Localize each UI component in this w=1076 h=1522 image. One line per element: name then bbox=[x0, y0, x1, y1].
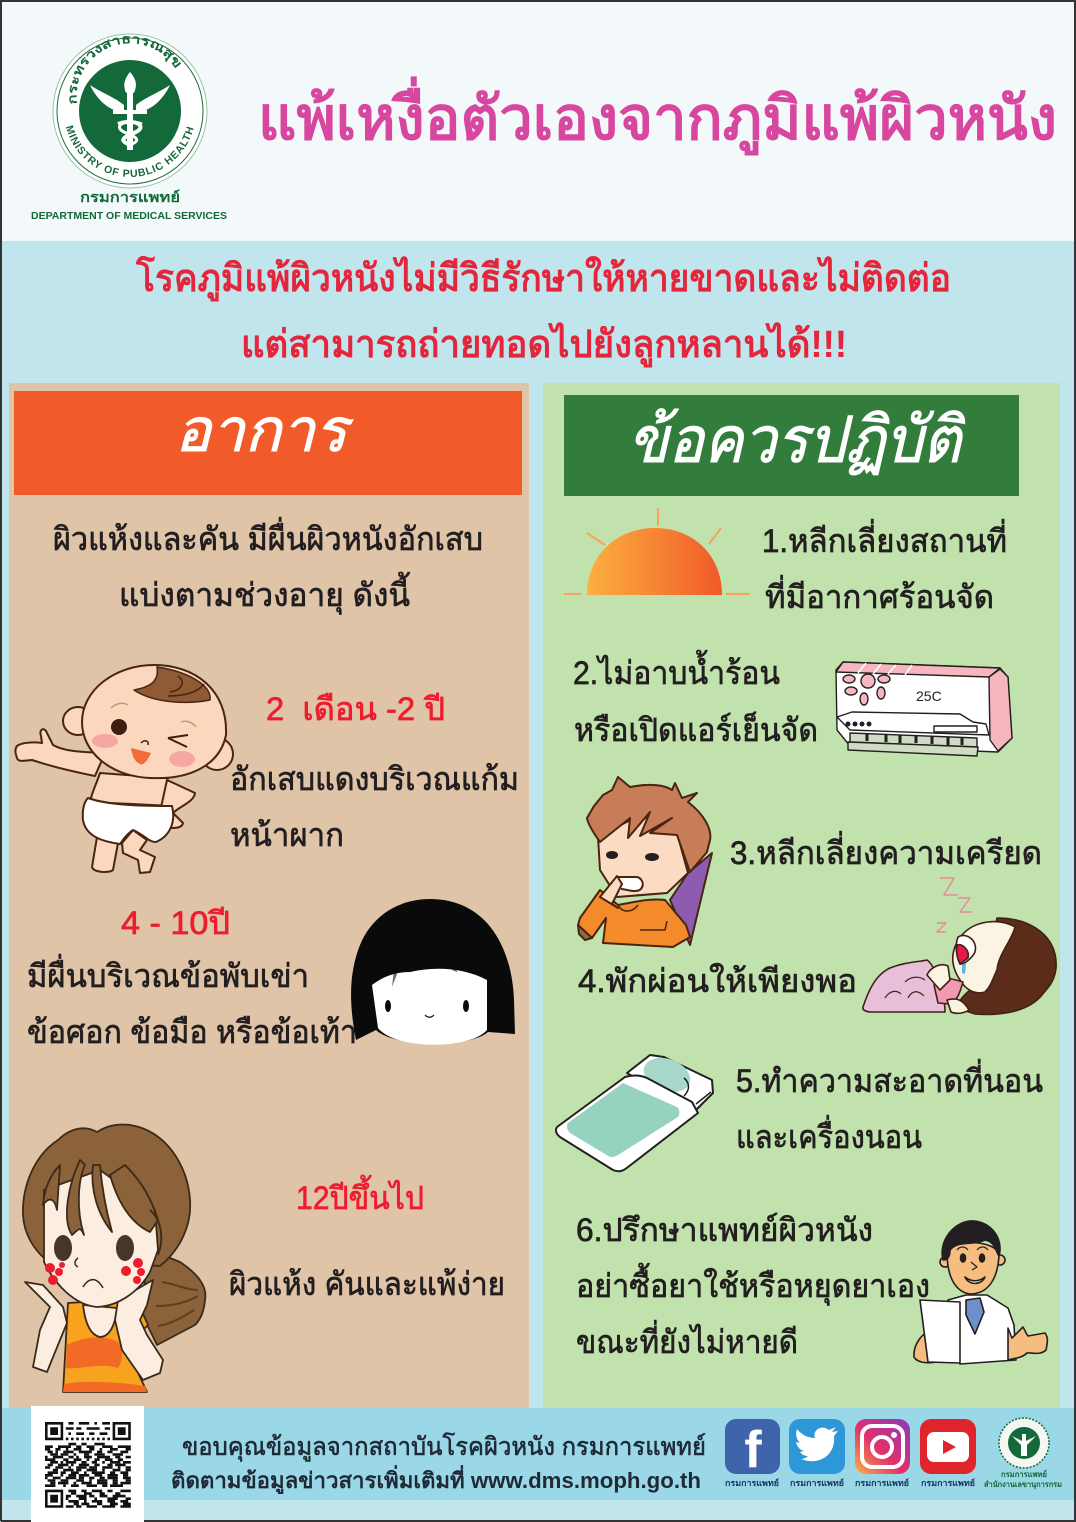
footer text bbox=[171, 1432, 706, 1495]
age: 4 to 10 years bbox=[27, 905, 357, 1050]
icon: air conditioner: 25C bbox=[916, 688, 942, 704]
item 1 bbox=[762, 519, 1007, 615]
footer text: ติดตามข้อมูลข่าวสารเพิ่มเติมที่ www.dms.moph.go.th bbox=[171, 1464, 701, 1495]
age: 4 to 10 years: มีผื่นบริเวณข้อพับเข่า bbox=[27, 954, 309, 994]
icon: black-haired child bbox=[351, 899, 515, 1045]
footer band bbox=[2, 1408, 1074, 1500]
icon: girl with rash bbox=[23, 1124, 205, 1392]
heading: recommendations: ข้อควรปฏิบัติ bbox=[628, 404, 966, 476]
subtitle bbox=[135, 255, 951, 368]
header band bbox=[2, 2, 1074, 241]
icon: facebook: กรมการแพทย์ bbox=[725, 1478, 779, 1488]
age: 2 months to 2 years: หน้าผาก bbox=[230, 817, 344, 853]
heading: recommendations bbox=[564, 395, 1019, 496]
icon: youtube bbox=[920, 1419, 976, 1488]
logo caption bbox=[31, 189, 227, 222]
icon: baby bbox=[15, 665, 233, 873]
QR code bbox=[31, 1406, 144, 1522]
icon: air conditioner bbox=[836, 662, 1012, 756]
panel: symptoms bbox=[9, 383, 529, 1409]
item 2: 2.ไม่อาบน้ำร้อน bbox=[573, 650, 780, 691]
age: 12 years and up: ผิวแห้ง คันและแพ้ง่าย bbox=[229, 1266, 505, 1302]
icon: facebook bbox=[725, 1419, 780, 1488]
item 6: อย่าซื้อยาใช้หรือหยุดยาเอง bbox=[576, 1263, 930, 1306]
icon: twitter bbox=[789, 1419, 845, 1488]
logo: Ministry of Public Health: กระทรวงสาธารณสุข bbox=[69, 36, 182, 104]
small logo: สำนักงานเลขานุการกรม bbox=[984, 1480, 1062, 1490]
item 6 bbox=[576, 1212, 930, 1360]
age: 2 months to 2 years: 2 เดือน -2 ปี bbox=[266, 691, 445, 727]
logo: Ministry of Public Health: MINISTRY OF PUBLIC HEALTH bbox=[66, 125, 194, 177]
logo: Ministry of Public Health bbox=[52, 34, 208, 188]
item 2 bbox=[573, 650, 818, 748]
icon: sun bbox=[564, 508, 750, 595]
icon: instagram bbox=[855, 1419, 910, 1488]
icon: doctor bbox=[914, 1221, 1047, 1364]
item 6: ขณะที่ยังไม่หายดี bbox=[576, 1320, 798, 1360]
item 6: 6.ปรึกษาแพทย์ผิวหนัง bbox=[576, 1212, 873, 1248]
symptoms intro: แบ่งตามช่วงอายุ ดังนี้ bbox=[119, 572, 411, 615]
icon: bedding bbox=[556, 1052, 713, 1171]
item 3: 3.หลีกเลี่ยงความเครียด bbox=[730, 831, 1042, 871]
logo caption: DEPARTMENT OF MEDICAL SERVICES bbox=[31, 211, 227, 222]
symptoms intro: ผิวแห้งและคัน มีผื่นผิวหนังอักเสบ bbox=[53, 517, 483, 557]
heading: symptoms bbox=[14, 391, 522, 495]
icon: sleeping girl bbox=[863, 878, 1056, 1014]
item 5 bbox=[736, 1059, 1043, 1155]
item 1: ที่มีอากาศร้อนจัด bbox=[765, 575, 994, 615]
footer text: ขอบคุณข้อมูลจากสถาบันโรคผิวหนัง กรมการแพทย์ bbox=[182, 1432, 706, 1462]
panel: recommendations bbox=[543, 383, 1060, 1409]
age: 2 months to 2 years bbox=[230, 691, 519, 853]
heading: symptoms: อาการ bbox=[175, 397, 354, 464]
small logo bbox=[984, 1418, 1062, 1490]
subtitle: โรคภูมิแพ้ผิวหนังไม่มีวิธีรักษาให้หายขาดและไม่ติดต่อ bbox=[135, 255, 951, 302]
icon: youtube: กรมการแพทย์ bbox=[921, 1478, 975, 1488]
subtitle: แต่สามารถถ่ายทอดไปยังลูกหลานได้!!! bbox=[241, 322, 847, 368]
icon: facebook: f bbox=[744, 1421, 762, 1479]
icon: stressed boy bbox=[578, 777, 712, 947]
item 5: และเครื่องนอน bbox=[736, 1115, 922, 1155]
small logo: กรมการแพทย์ bbox=[1001, 1469, 1047, 1479]
icon: twitter: กรมการแพทย์ bbox=[790, 1478, 844, 1488]
age: 12 years and up bbox=[229, 1175, 505, 1302]
age: 12 years and up: 12ปีขึ้นไป bbox=[296, 1175, 424, 1216]
symptoms intro bbox=[53, 517, 483, 615]
item 2: หรือเปิดแอร์เย็นจัด bbox=[574, 711, 818, 748]
item 4: 4.พักผ่อนให้เพียงพอ bbox=[578, 963, 857, 999]
item 1: 1.หลีกเลี่ยงสถานที่ bbox=[762, 519, 1007, 559]
age: 2 months to 2 years: อักเสบแดงบริเวณแก้ม bbox=[230, 761, 519, 797]
title: แพ้เหงื่อตัวเองจากภูมิแพ้ผิวหนัง bbox=[258, 76, 1057, 156]
icon: instagram: กรมการแพทย์ bbox=[855, 1478, 909, 1488]
age: 4 to 10 years: ข้อศอก ข้อมือ หรือข้อเท้า bbox=[27, 1014, 357, 1050]
logo caption: กรมการแพทย์ bbox=[80, 189, 180, 205]
age: 4 to 10 years: 4 - 10ปี bbox=[121, 905, 230, 941]
item 5: 5.ทำความสะอาดที่นอน bbox=[736, 1059, 1043, 1099]
